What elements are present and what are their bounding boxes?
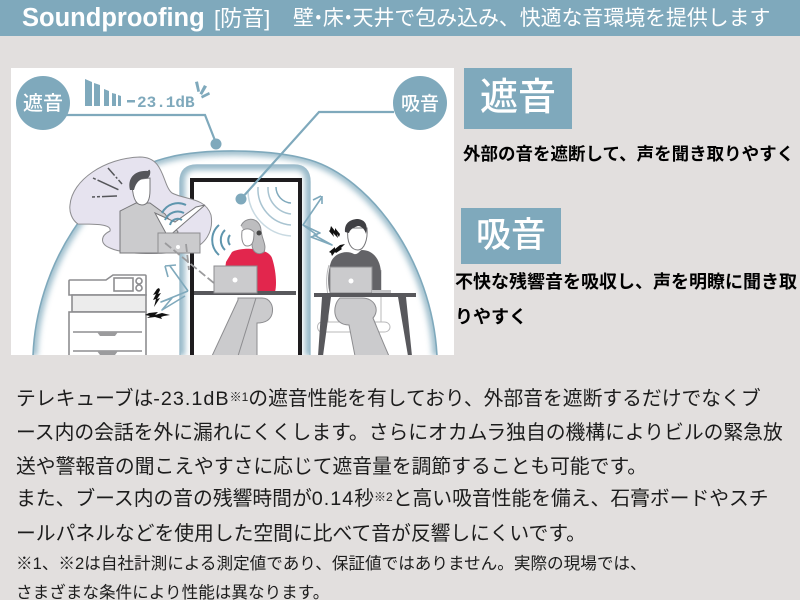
- header subtitle: 壁・床・天井で包み込み、快適な音環境を提供します: [293, 7, 770, 30]
- callout: sound insulation: [16, 76, 222, 150]
- laptop: [158, 233, 200, 253]
- noise lightning: [145, 226, 345, 319]
- text: sound absorption: [455, 272, 797, 327]
- body paragraph: [16, 388, 783, 545]
- header title: Soundproofing: [22, 4, 205, 32]
- woman with headset: [212, 219, 276, 356]
- body paragraph: テレキューブは-23.1dB※1の遮音性能を有しており、外部音を遮断するだけでなくブ: [16, 388, 761, 410]
- person: [120, 203, 178, 253]
- illustration panel: [11, 68, 454, 355]
- decibel meter: [85, 79, 210, 112]
- man's laptop: [330, 267, 391, 293]
- footnote: ※1、※2は自社計測による測定値であり、保証値ではありません。実際の現場では、: [16, 554, 647, 573]
- speech lines: [92, 168, 122, 197]
- heading: sound absorption: 吸音: [476, 216, 546, 255]
- heading: sound absorption: [461, 208, 561, 264]
- dashed sight line: [165, 243, 220, 288]
- wifi waves: [162, 203, 186, 225]
- woman's laptop: [214, 266, 257, 293]
- heading: sound insulation: 遮音: [480, 77, 556, 119]
- booth frame: [192, 180, 300, 356]
- man's desk: [314, 293, 416, 356]
- header tag: [防音]: [214, 6, 270, 31]
- callout: sound absorption: [236, 76, 447, 204]
- body paragraph: ース内の会話を外に漏れにくくします。さらにオカムラ独自の機構によりビルの緊急放: [16, 422, 783, 444]
- text: sound absorption: 不快な残響音を吸収し、声を明瞭に聞き取: [455, 272, 797, 292]
- callout: sound absorption: 吸音: [401, 93, 439, 115]
- blue reflected sound arrows: [161, 196, 332, 310]
- thought bubble with talking person: [70, 157, 212, 254]
- dome: [33, 151, 437, 356]
- body paragraph: 送や警報音の聞こえやすさに応じて遮音量を調節することも可能です。: [16, 456, 647, 478]
- man with laptop: [318, 219, 390, 356]
- printer: [69, 275, 146, 356]
- body paragraph: また、ブース内の音の残響時間が0.14秒※2と高い吸音性能を備え、石膏ボードやスチ: [16, 488, 769, 510]
- text: sound absorption: りやすく: [455, 307, 527, 327]
- body paragraph: ールパネルなどを使用した空間に比べて音が反響しにくいです。: [16, 523, 586, 545]
- heading: sound insulation: [464, 68, 572, 129]
- footnote: [16, 554, 647, 600]
- text: sound insulation: 外部の音を遮断して、声を聞き取りやすく: [463, 144, 794, 164]
- woman's desk: [194, 291, 296, 295]
- header band: [0, 0, 800, 36]
- sound absorption waves: [248, 187, 291, 236]
- callout: sound insulation: 遮音: [23, 92, 63, 115]
- woman wifi waves: [212, 225, 230, 255]
- decibel meter: 23.1dB: [137, 94, 195, 112]
